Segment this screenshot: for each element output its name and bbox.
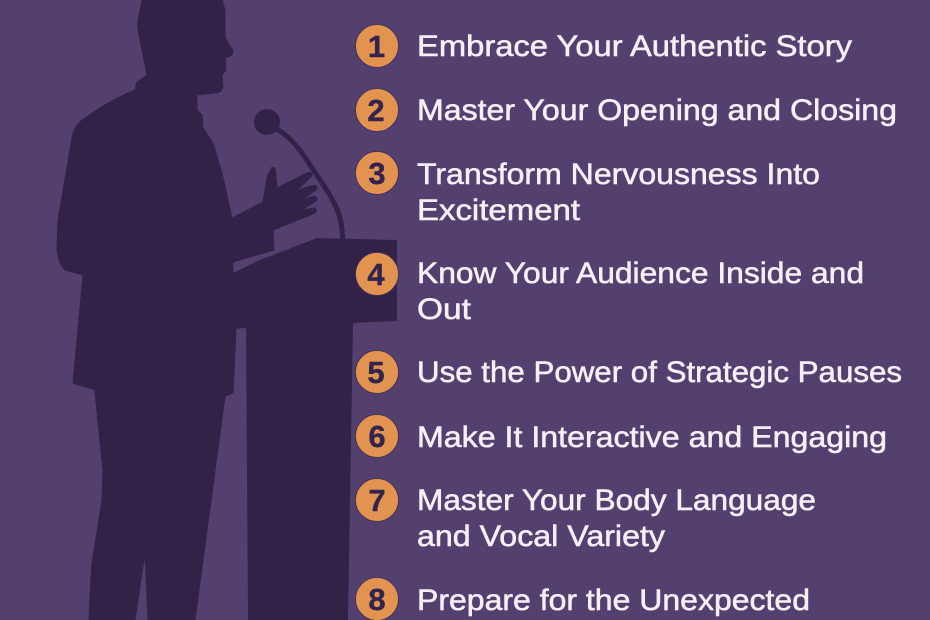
list item 8 [356,578,810,620]
item 2 text: Master Your Opening and Closing [417,94,897,127]
item 4 text: Out [417,293,472,326]
number badge 3: 3 [368,156,386,191]
number badge 2: 2 [367,93,385,128]
number badge 7 [356,478,398,522]
list item 5 [356,350,902,394]
item 7 text: and Vocal Variety [417,520,665,553]
speaker silhouette [57,0,317,620]
number badge 6 [356,414,398,458]
number badge 4 [356,252,398,296]
number badge 1 [356,24,398,68]
list item 4 [356,252,864,326]
item 8 text: Prepare for the Unexpected [417,584,810,617]
item 4 text: Know Your Audience Inside and [417,257,864,290]
list item 3 [356,152,820,227]
item 7 text [417,484,816,553]
number badge 8: 8 [368,582,386,617]
number badge 5: 5 [367,355,385,390]
list item 7 [356,478,816,553]
microphone [254,109,343,240]
list item 6 [356,414,887,458]
item 3 text [417,158,820,227]
item 3 text: Excitement [417,194,581,227]
illustration: speaker at podium [57,0,397,620]
number badge 3 [356,152,398,194]
number badge 8 [356,578,398,620]
item 7 text: Master Your Body Language [417,484,816,517]
number badge 2 [356,88,398,132]
item 6 text: Make It Interactive and Engaging [417,421,887,454]
item 4 text [417,257,864,326]
list item 1 [356,24,852,68]
number badge 6: 6 [368,419,386,454]
podium [233,238,397,620]
list item 2 [356,88,897,132]
number badge 7: 7 [368,483,386,518]
item 5 text: Use the Power of Strategic Pauses [417,356,902,389]
number badge 4: 4 [367,257,385,292]
item 1 text: Embrace Your Authentic Story [417,30,852,63]
number badge 5 [356,350,398,394]
number badge 1: 1 [368,29,385,64]
item 3 text: Transform Nervousness Into [417,158,820,191]
